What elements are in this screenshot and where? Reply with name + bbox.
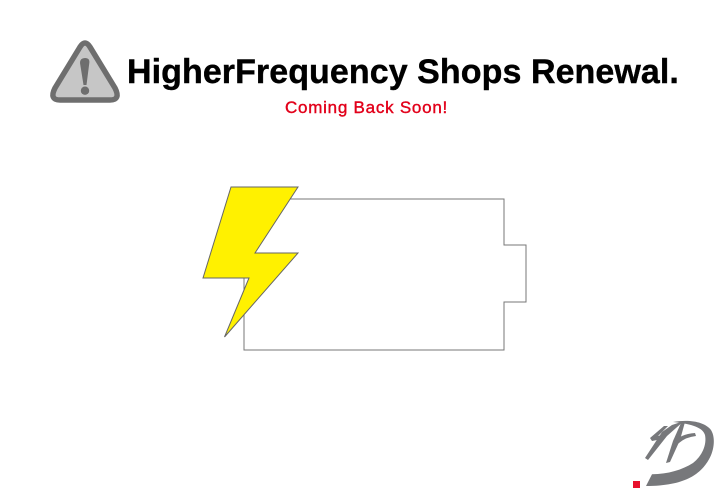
title: HigherFrequency Shops Renewal. xyxy=(127,53,679,91)
logo right stem xyxy=(666,422,685,463)
logo red square xyxy=(633,481,640,488)
icon: lightning bolt xyxy=(203,187,298,337)
logo crossbar xyxy=(650,426,696,448)
logo monogram xyxy=(645,421,696,463)
logo swoosh xyxy=(646,421,714,486)
subtitle: Coming Back Soon! xyxy=(285,98,448,117)
icon: warning triangle xyxy=(53,43,117,100)
logo xyxy=(633,421,714,488)
icon: battery outline xyxy=(244,199,526,350)
logo left stem xyxy=(645,421,684,460)
